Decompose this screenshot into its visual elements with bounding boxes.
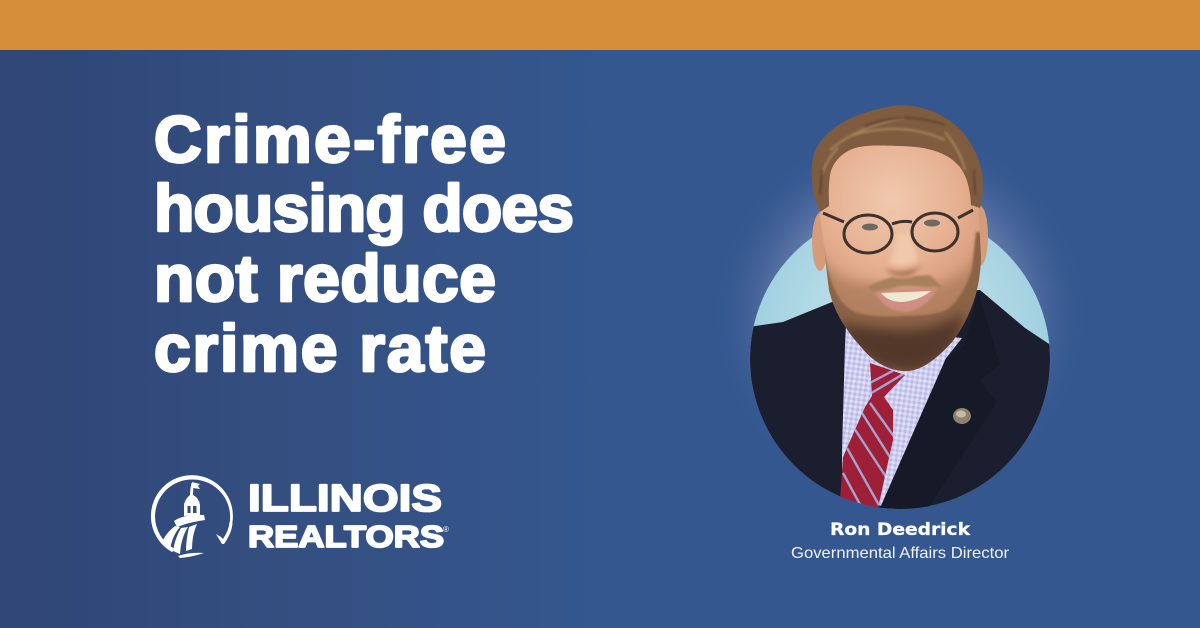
headline: not reduce xyxy=(154,241,496,315)
hair xyxy=(812,105,983,212)
icon: capitol dome in circle xyxy=(151,475,233,558)
nose xyxy=(884,232,924,276)
headline: Crime-free xyxy=(154,102,506,176)
headline: crime rate xyxy=(154,311,486,385)
portrait: Ron Deedrick xyxy=(740,105,1060,520)
ears xyxy=(812,206,988,271)
jacket xyxy=(750,290,1050,509)
tie xyxy=(840,363,905,510)
portrait glow xyxy=(710,125,1090,505)
caption xyxy=(791,520,1010,562)
wordmark: REALTORS xyxy=(248,519,444,554)
logo: Illinois Realtors xyxy=(151,475,449,558)
lapel pin xyxy=(953,408,971,424)
name: Ron Deedrick xyxy=(830,520,971,540)
top orange band xyxy=(0,0,1200,50)
beard xyxy=(824,230,981,371)
registered mark: ® xyxy=(443,525,449,534)
job title: Governmental Affairs Director xyxy=(791,545,1010,562)
backdrop circle xyxy=(750,209,1050,509)
wordmark xyxy=(248,478,444,554)
shirt xyxy=(842,325,962,506)
lapel xyxy=(880,357,947,509)
headline xyxy=(154,102,574,385)
eyes xyxy=(862,220,940,230)
wordmark: ILLINOIS xyxy=(248,478,442,520)
glasses xyxy=(823,210,973,253)
mouth xyxy=(875,288,937,312)
moustache xyxy=(867,275,942,292)
face xyxy=(819,146,981,371)
headline: housing does xyxy=(154,171,574,245)
